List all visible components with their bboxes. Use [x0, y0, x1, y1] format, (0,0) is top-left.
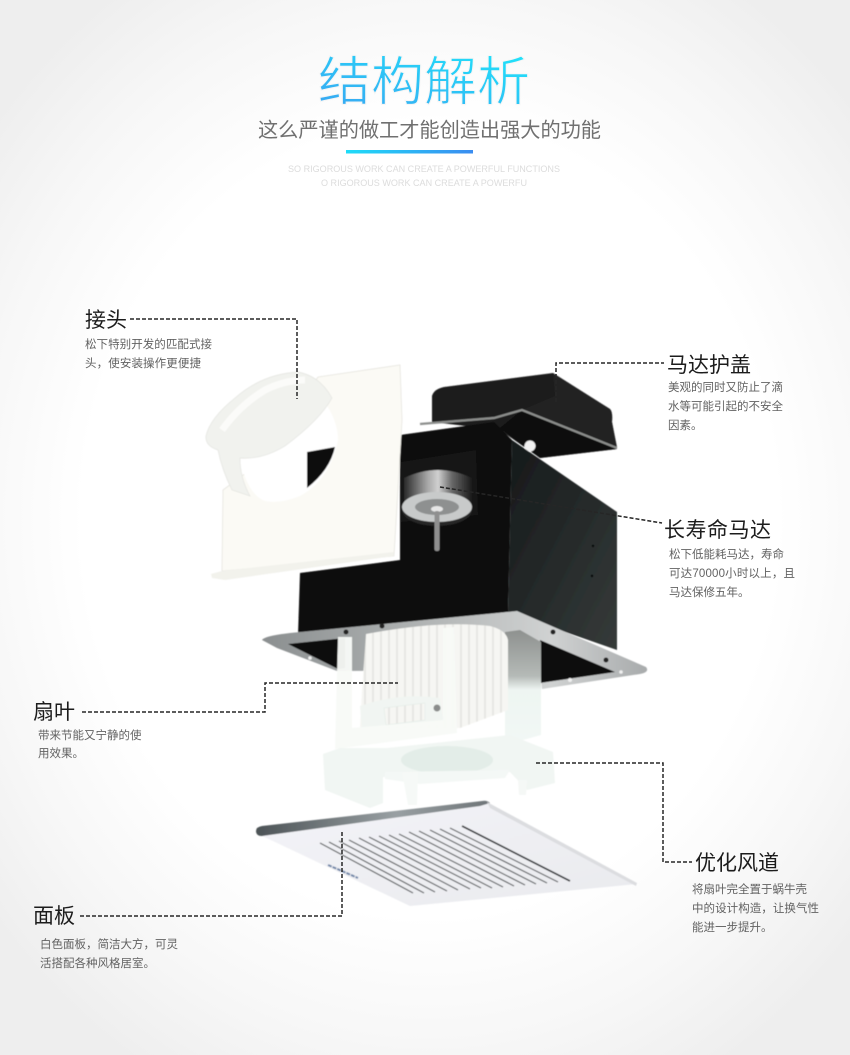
callout: panel: 白色面板，简洁大方，可灵: [40, 937, 178, 951]
callout: panel: [33, 905, 178, 970]
callout: fan blade: 扇叶: [33, 701, 75, 724]
flange: [262, 611, 647, 689]
airway base: [323, 735, 555, 808]
callout: fan blade: 带来节能又宁静的使: [38, 728, 142, 742]
english subtitle: SO RIGOROUS WORK CAN CREATE A POWERFUL FUNCTIONS: [288, 164, 560, 175]
callout: connector: [85, 309, 212, 370]
english subtitle: O RIGOROUS WORK CAN CREATE A POWERFU: [321, 178, 527, 189]
motor: [401, 450, 478, 551]
callout: optimized air duct: 优化风道: [695, 852, 779, 875]
callout: motor cover: 美观的同时又防止了滴: [668, 380, 783, 394]
bracket: [335, 627, 457, 749]
exploded product illustration: [206, 365, 647, 906]
callout: connector: 松下特别开发的匹配式接: [85, 337, 212, 351]
callout: optimized air duct: 将扇叶完全置于蜗牛壳: [692, 882, 807, 896]
callout: optimized air duct: 中的设计构造，让换气性: [692, 901, 819, 915]
connector collar: [206, 372, 332, 496]
cover mounting hole: [524, 440, 536, 452]
callout: motor cover: 马达护盖: [667, 354, 751, 377]
connector: [206, 365, 402, 580]
callout: panel: 面板: [33, 905, 75, 928]
black housing: [298, 422, 617, 650]
callout: long-life motor: 可达70000小时以上，且: [669, 566, 795, 580]
title: 结构解析: [318, 53, 530, 112]
motor cover: [420, 373, 617, 458]
callout: long-life motor: 松下低能耗马达，寿命: [669, 547, 784, 561]
scroll housing: [505, 630, 541, 745]
title accent bar: [346, 150, 473, 154]
callout: motor cover: 因素。: [668, 419, 702, 432]
callout: optimized air duct: 能进一步提升。: [692, 920, 772, 934]
subtitle: 这么严谨的做工才能创造出强大的功能: [258, 119, 601, 142]
dashed leader lines: [80, 319, 692, 916]
callout: panel: 活搭配各种风格居室。: [40, 956, 155, 970]
callout: long-life motor: [664, 519, 795, 599]
connector hole: [240, 400, 338, 502]
callout: connector: 头，使安装操作更便捷: [85, 356, 202, 370]
callout: long-life motor: 马达保修五年。: [669, 585, 750, 599]
callout: optimized air duct: [692, 852, 819, 934]
callout: motor cover: 水等可能引起的不安全: [668, 399, 783, 413]
english subtitle: [288, 164, 560, 189]
callout: motor cover: [667, 354, 783, 432]
callout: fan blade: 用效果。: [38, 746, 84, 760]
panel logo: [328, 865, 358, 878]
callout: fan blade: [33, 701, 142, 760]
fan blades: [360, 624, 508, 728]
grille panel: [256, 801, 637, 906]
callout: long-life motor: 长寿命马达: [664, 519, 771, 542]
callout: connector: 接头: [85, 309, 127, 332]
